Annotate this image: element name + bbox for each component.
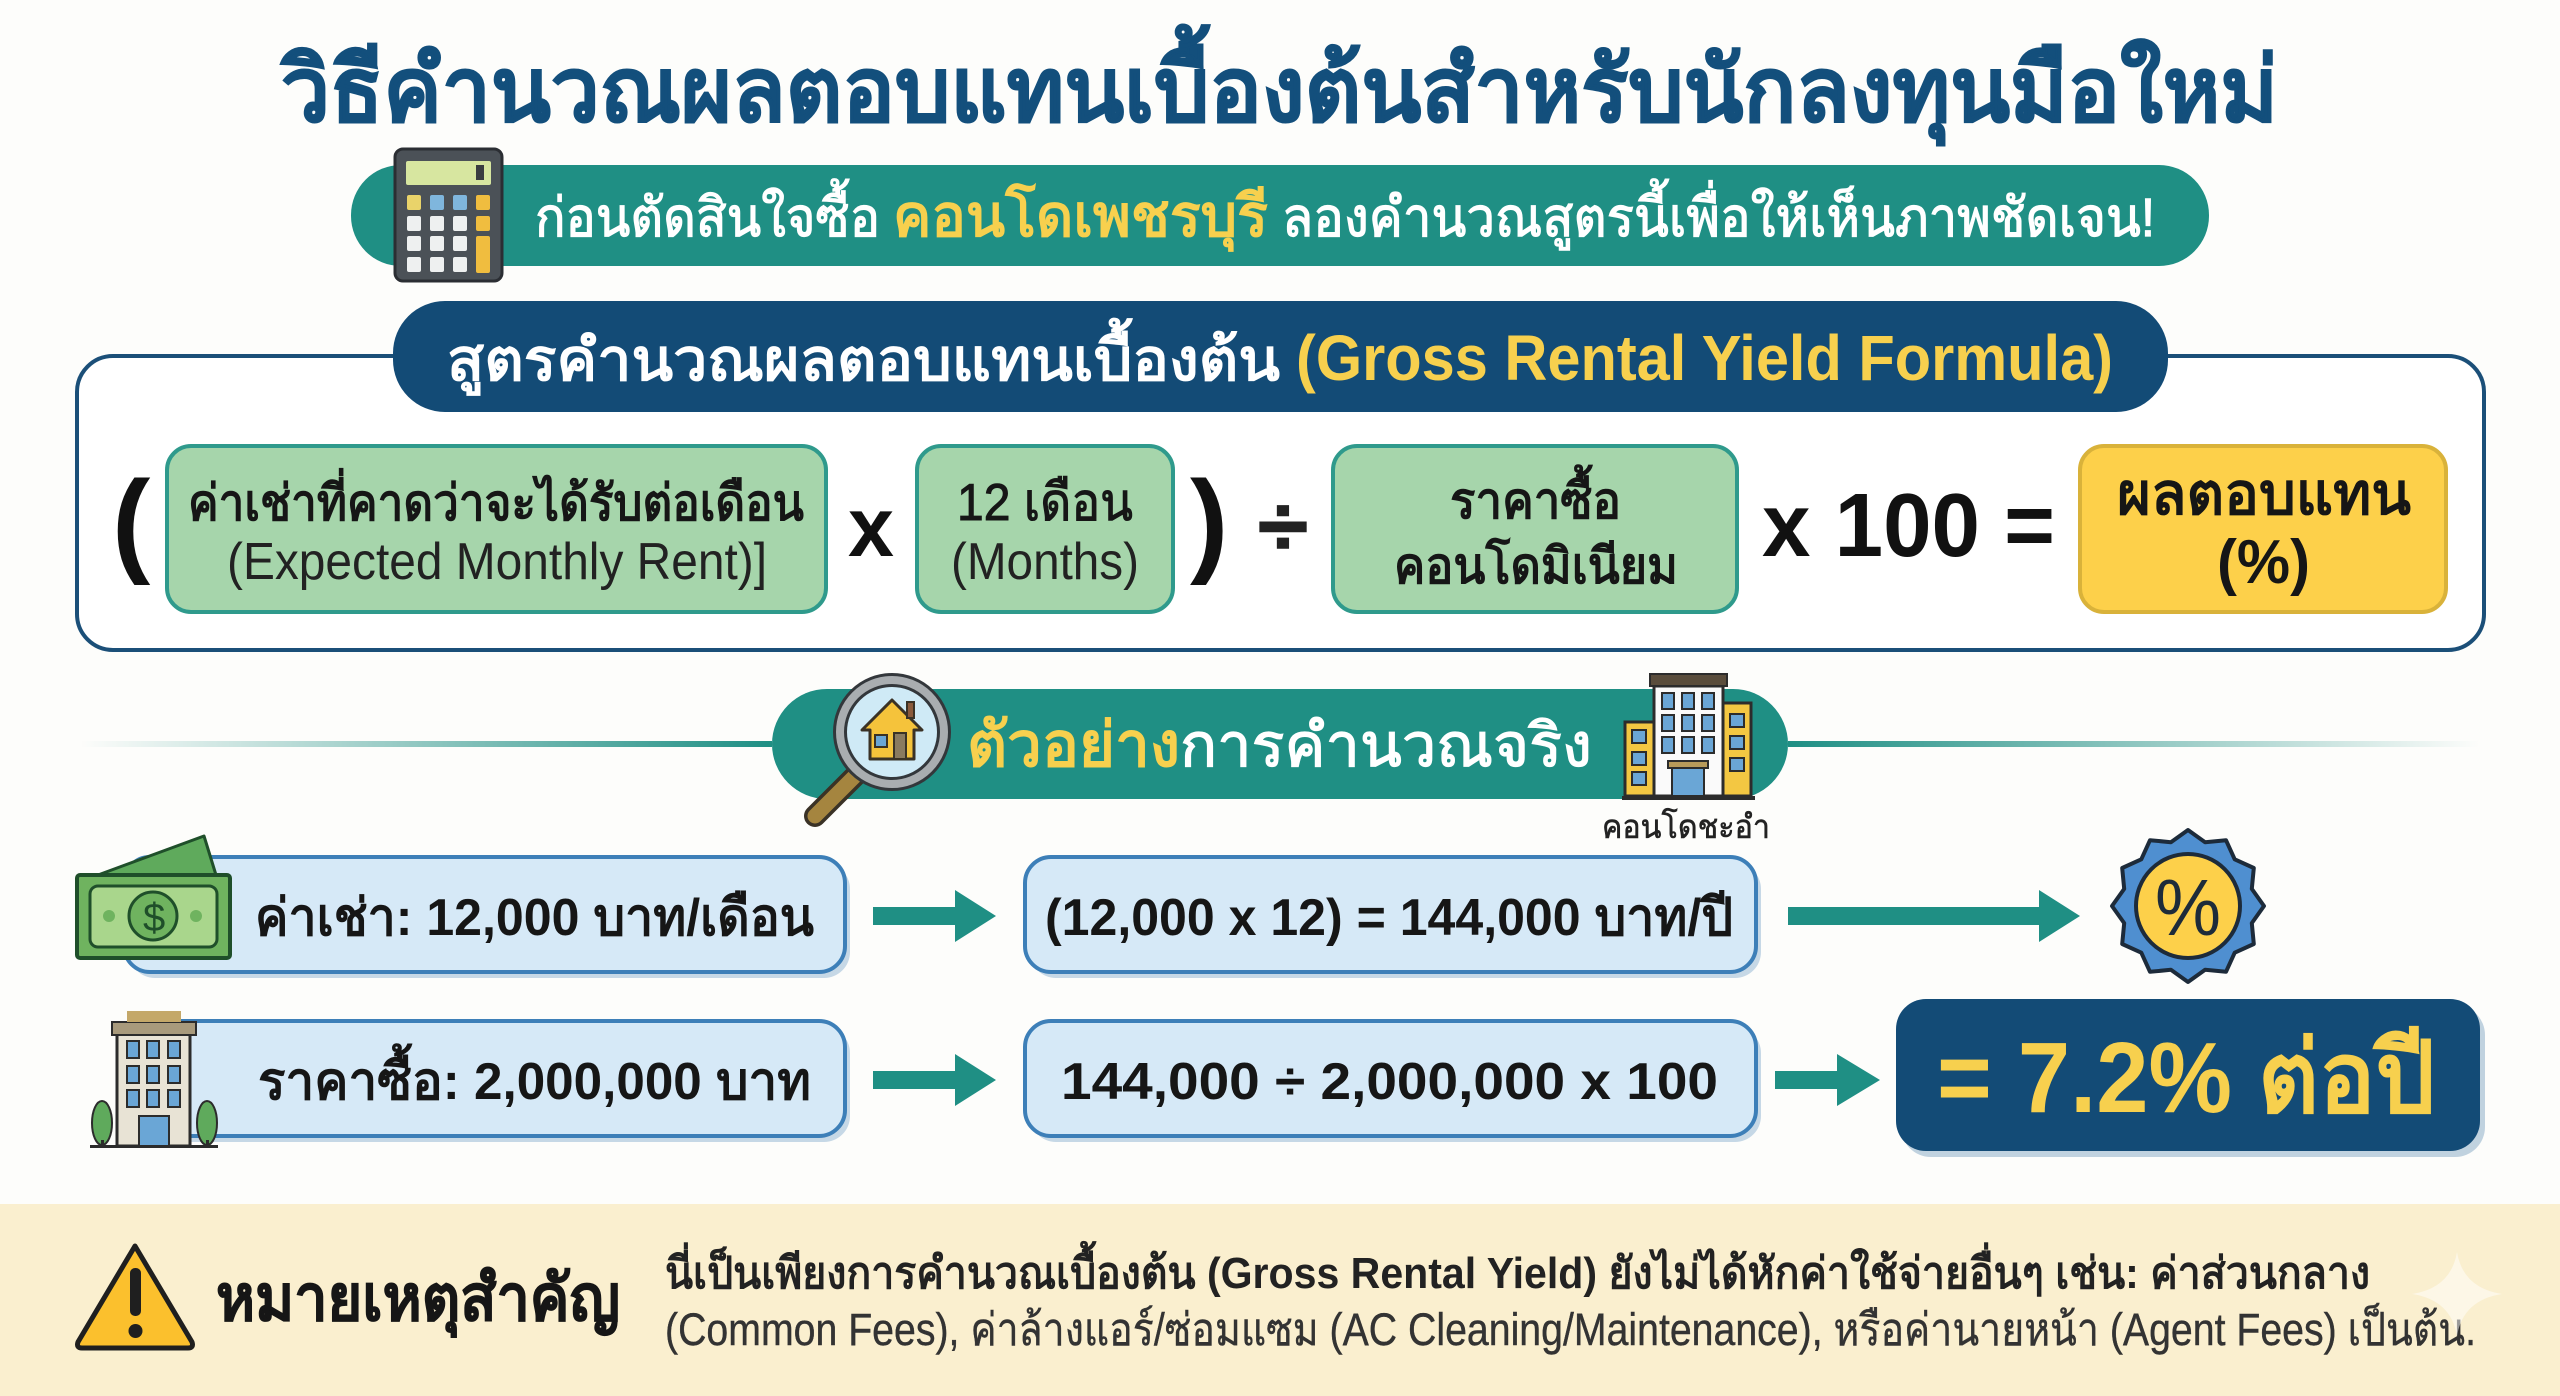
note text (665, 1240, 2476, 1355)
section heading: real calculation example (772, 674, 1788, 845)
result box: = 7.2% ต่อปี (1937, 1022, 2435, 1134)
formula box: monthly rent (167, 446, 826, 612)
price box (124, 1021, 850, 1142)
icon: warning (78, 1246, 192, 1348)
rent box: ค่าเช่า: 12,000 บาท/เดือน (255, 889, 814, 947)
example row 2 (90, 999, 2485, 1157)
arrow (1775, 1054, 1880, 1106)
formula box: result: (%) (2217, 528, 2310, 597)
icon: money (77, 836, 230, 958)
note text: นี่เป็นเพียงการคำนวณเบื้องต้น (Gross Rental Yield) ยังไม่ได้หักค่าใช้จ่ายอื่นๆ เช่น: ค่าส่วนกลาง (665, 1240, 2370, 1298)
calculation box (1025, 1021, 1761, 1142)
subtitle text: ลองคำนวณสูตรนี้เพื่อให้เห็นภาพชัดเจน! (1282, 179, 2155, 250)
formula box: purchase price: คอนโดมิเนียม (1394, 536, 1678, 594)
icon label: คอนโดชะอำ (1602, 808, 1770, 845)
subtitle text (535, 179, 2155, 253)
icon: percent badge (2112, 830, 2264, 982)
rent box (124, 857, 850, 978)
icon: money: $ (143, 896, 165, 940)
multiply sign: x (848, 480, 894, 574)
subtitle banner (351, 149, 2209, 281)
subtitle text: ก่อนตัดสินใจซื้อ (535, 179, 880, 248)
icon: building (90, 1011, 218, 1148)
times 100 equals: x 100 = (1762, 476, 2055, 576)
formula heading (393, 301, 2168, 412)
arrow (873, 1054, 996, 1106)
annual rent box (1025, 857, 1761, 978)
formula box: purchase price (1333, 446, 1737, 612)
formula box: months: 12 เดือน (957, 474, 1133, 532)
note heading: หมายเหตุสำคัญ (216, 1262, 620, 1338)
formula box: monthly rent: (Expected Monthly Rent)] (227, 533, 767, 591)
formula heading: (Gross Rental Yield Formula) (1296, 322, 2113, 394)
footer note band (0, 1204, 2560, 1396)
close bracket: ) (1190, 458, 1228, 586)
panel: formula (77, 301, 2484, 650)
open bracket: ( (112, 458, 151, 586)
formula box: purchase price: ราคาซื้อ (1450, 464, 1621, 529)
result box (1896, 999, 2485, 1157)
icon: magnifier with house (815, 680, 944, 816)
formula box: result: ผลตอบแทน (2117, 462, 2411, 527)
formula box: monthly rent: ค่าเช่าที่คาดว่าจะได้รับต่อเดือน (188, 468, 804, 531)
section heading: real calculation example: การคำนวณจริง (1180, 712, 1592, 779)
formula box: months: (Months) (951, 533, 1139, 591)
subtitle text: คอนโดเพชรบุรี (893, 181, 1268, 253)
title: วิธีคำนวณผลตอบแทนเบื้องต้นสำหรับนักลงทุนมือใหม่ (280, 24, 2278, 147)
long arrow (1788, 890, 2080, 942)
divider right (1788, 741, 2480, 747)
formula box: result (2080, 446, 2446, 612)
icon: calculator (395, 149, 502, 281)
icon: percent badge: % (2155, 863, 2221, 952)
section heading: real calculation example: ตัวอย่าง (967, 711, 1180, 780)
sparkle (2412, 1252, 2502, 1336)
calculation box: 144,000 ÷ 2,000,000 x 100 (1061, 1053, 1718, 1111)
formula box: months (917, 446, 1173, 612)
price box: ราคาซื้อ: 2,000,000 บาท (258, 1043, 811, 1111)
annual rent box: (12,000 x 12) = 144,000 บาท/ปี (1045, 889, 1733, 947)
divider left (80, 741, 772, 747)
example row 1 (77, 830, 2264, 982)
arrow (873, 890, 996, 942)
icon: condo buildings (1622, 674, 1755, 800)
formula heading: สูตรคำนวณผลตอบแทนเบื้องต้น (447, 318, 1280, 396)
divide sign: ÷ (1258, 479, 1308, 573)
